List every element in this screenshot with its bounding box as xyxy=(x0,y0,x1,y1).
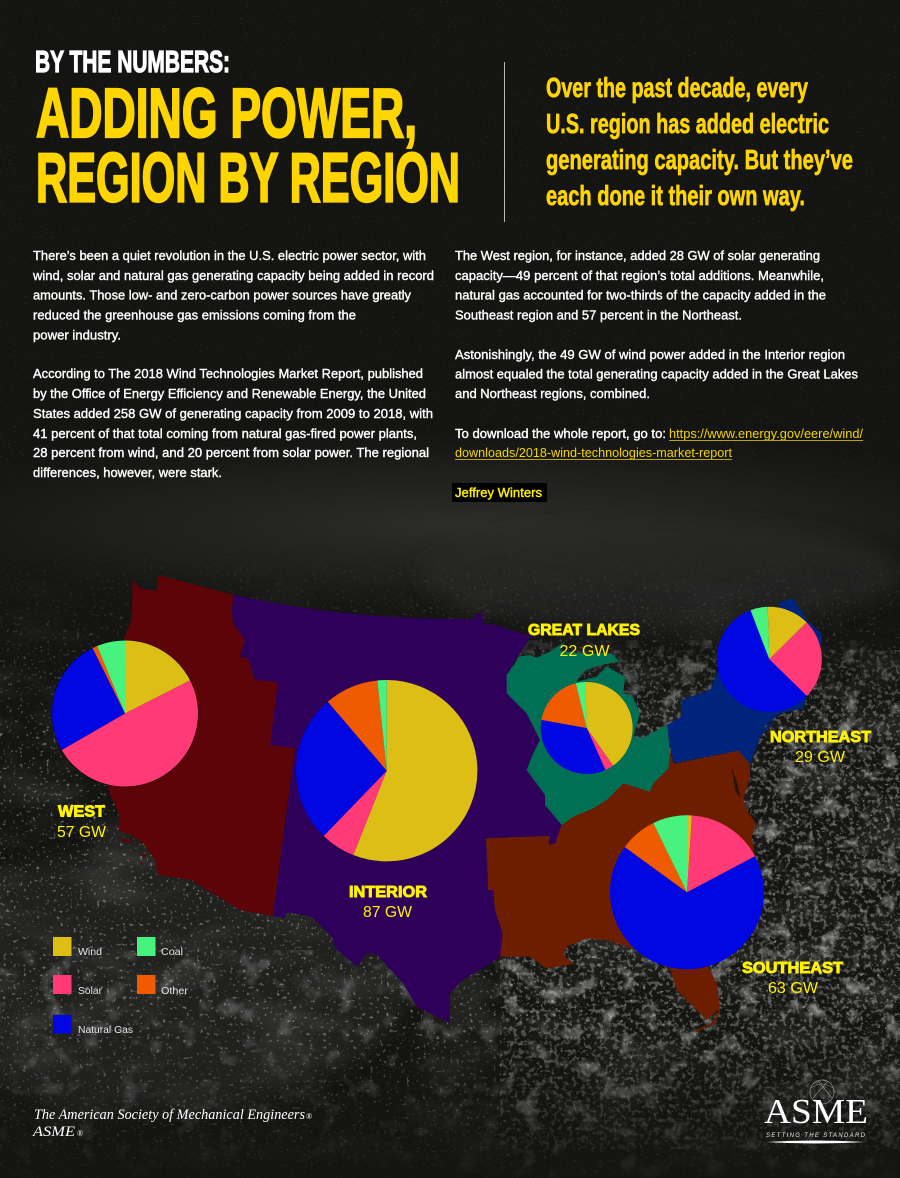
footer: society name xyxy=(32,1107,312,1140)
body text: right column, second paragraph: almost equaled the total generating capacity added in the Great Lakes xyxy=(455,366,858,382)
region: West xyxy=(108,575,295,916)
region label: Great Lakes: 22 GW xyxy=(560,643,610,660)
main title xyxy=(36,74,460,216)
region label: West xyxy=(57,804,107,841)
body text: left column, second paragraph: 41 percent of that total coming from natural gas-fired power plants, xyxy=(33,426,417,441)
ASME logo: SETTING THE STANDARD xyxy=(766,1133,866,1139)
body text: right column, first paragraph: Southeast region and 57 percent in the Northeast. xyxy=(455,308,742,322)
region label: West: WEST xyxy=(58,804,105,820)
legend: Solar xyxy=(78,985,102,997)
body text: left column, first paragraph: power industry. xyxy=(33,328,121,342)
footer: society name: ASME xyxy=(32,1124,75,1140)
body text: right column, second paragraph: Astonishingly, the 49 GW of wind power added in the Interior region xyxy=(455,347,845,362)
region label: Southeast: SOUTHEAST xyxy=(742,960,843,977)
body text: left column, first paragraph: reduced the greenhouse gas emissions coming from the xyxy=(33,308,356,322)
region label: Northeast xyxy=(770,729,871,766)
legend: Natural Gas xyxy=(78,1024,133,1036)
body text: right column, second paragraph: and Northeast regions, combined. xyxy=(455,386,650,401)
legend: Coal xyxy=(161,946,183,958)
footer: society name: ® xyxy=(306,1112,312,1121)
region label: Southeast: 63 GW xyxy=(768,980,819,997)
region label: Interior: INTERIOR xyxy=(349,884,427,901)
body text: right column, first paragraph xyxy=(455,248,826,322)
pie chart: Great Lakes xyxy=(564,705,610,751)
region: Great Lakes xyxy=(507,642,670,825)
body text: left column, second paragraph: States added 258 GW of generating capacity from 2009 to 2018, with xyxy=(33,406,433,421)
region label: West: 57 GW xyxy=(57,824,107,841)
region label: Southeast xyxy=(742,960,843,997)
main title: ADDING POWER, xyxy=(36,74,417,152)
body text: left column, second paragraph: According to The 2018 Wind Technologies Market Report, published xyxy=(33,366,423,381)
region label: Great Lakes xyxy=(528,622,640,660)
body text: left column, second paragraph: differences, however, were stark. xyxy=(33,465,222,480)
body text: left column, second paragraph: by the Office of Energy Efficiency and Renewable Energy, the United xyxy=(33,386,426,401)
body text: right column, first paragraph: The West region, for instance, added 28 GW of solar generating xyxy=(455,248,820,263)
region: Southeast xyxy=(486,750,756,1032)
region: Interior xyxy=(232,595,562,1023)
legend: Other xyxy=(161,985,189,997)
report download link: downloads/2018-wind-technologies-market-report xyxy=(455,445,732,460)
body text: left column, second paragraph: 28 percent from wind, and 20 percent from solar power. The regional xyxy=(33,445,429,460)
body text: left column, second paragraph xyxy=(33,366,433,480)
region label: Northeast: NORTHEAST xyxy=(770,729,871,746)
main title: REGION BY REGION xyxy=(36,138,460,216)
region label: Interior xyxy=(349,884,427,921)
author byline: Jeffrey Winters xyxy=(455,485,542,500)
divider xyxy=(504,62,505,222)
body text: left column, first paragraph: amounts. Those low- and zero-carbon power sources have greatly xyxy=(33,288,411,302)
report download link: To download the whole report, go to: xyxy=(455,426,666,441)
footer: society name: ® xyxy=(77,1129,83,1138)
ASME logo xyxy=(764,1080,868,1144)
legend: Wind xyxy=(78,946,102,958)
body text: right column, first paragraph: natural gas accounted for two-thirds of the capacity added in the xyxy=(455,288,826,302)
body text: right column, second paragraph xyxy=(455,347,858,401)
body text: right column, first paragraph: capacity—49 percent of that region’s total additions. Meanwhile, xyxy=(455,268,824,283)
body text: left column, first paragraph: wind, solar and natural gas generating capacity being added in record xyxy=(32,268,434,283)
footer: society name: The American Society of Mechanical Engineers xyxy=(34,1107,305,1123)
body text: left column, first paragraph: There’s been a quiet revolution in the U.S. electric power sector, with xyxy=(33,248,426,263)
pie chart: West xyxy=(51,640,199,787)
map of U.S. regions xyxy=(108,575,822,1032)
region label: Northeast: 29 GW xyxy=(795,749,846,766)
region label: Great Lakes: GREAT LAKES xyxy=(528,622,640,639)
pie chart: Southeast xyxy=(648,854,726,931)
pie chart: Northeast xyxy=(743,633,796,686)
report download link: https://www.energy.gov/eere/wind/ xyxy=(669,426,863,441)
subtitle xyxy=(546,72,853,211)
body text: left column, first paragraph xyxy=(32,248,434,342)
subtitle: each done it their own way. xyxy=(546,180,805,211)
legend xyxy=(53,937,189,1036)
region: Northeast xyxy=(667,598,822,764)
kicker heading: BY THE NUMBERS: xyxy=(35,44,230,79)
ASME logo: ASME xyxy=(764,1092,868,1131)
region label: Interior: 87 GW xyxy=(363,904,413,921)
report download link xyxy=(455,426,863,460)
pie chart: Interior xyxy=(341,725,432,816)
